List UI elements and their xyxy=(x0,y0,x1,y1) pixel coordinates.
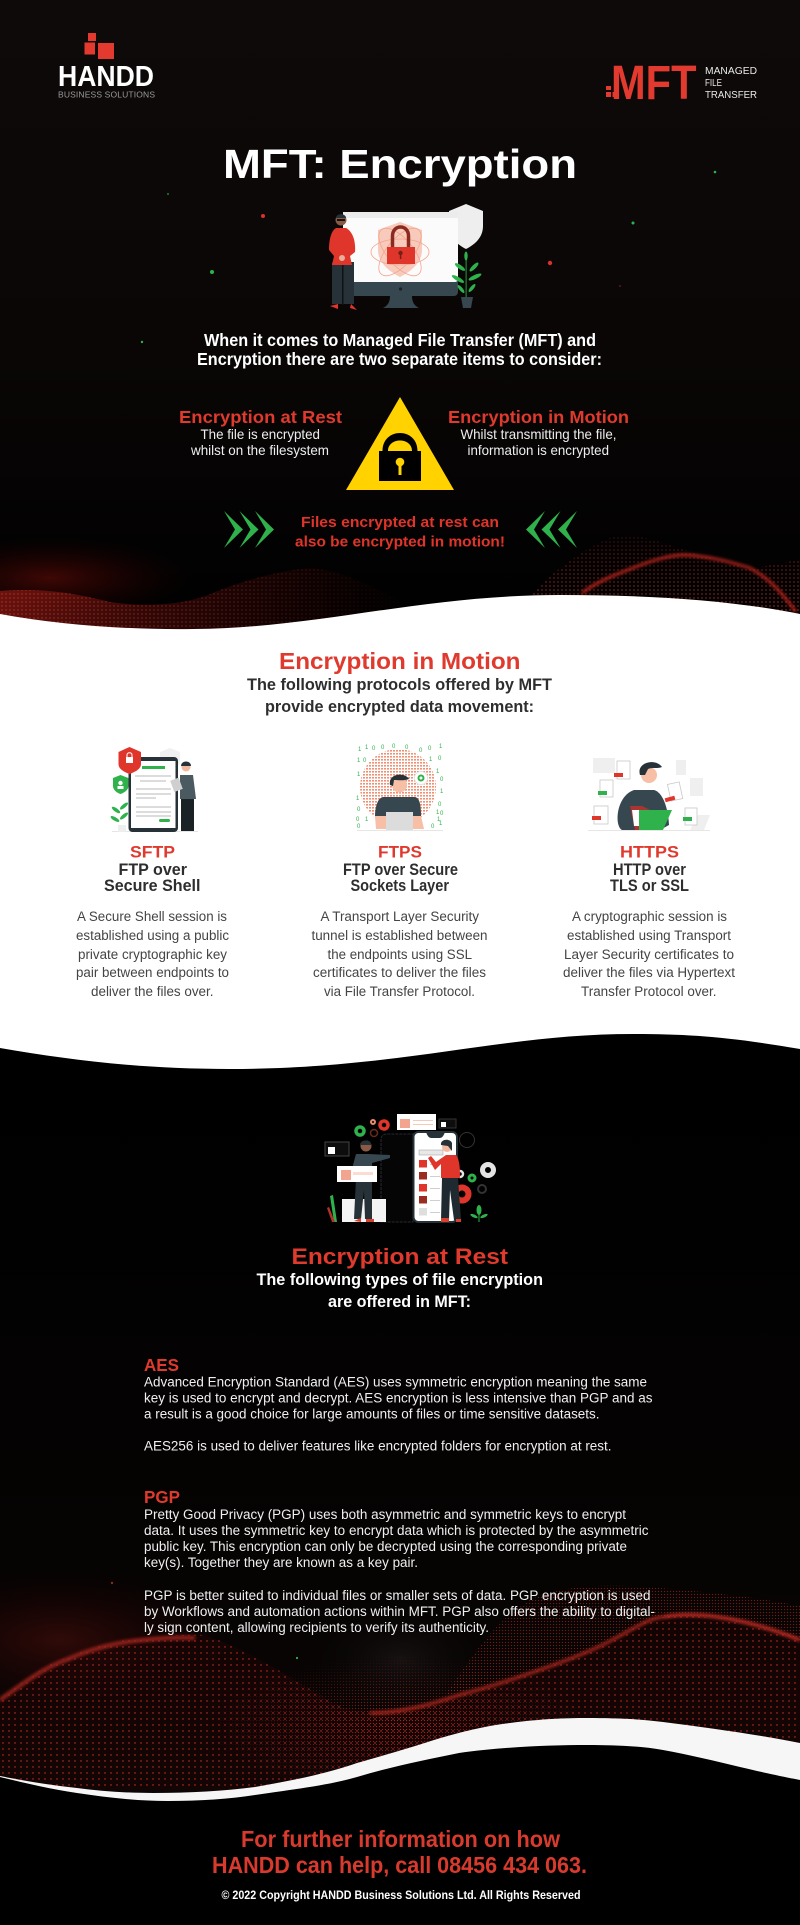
text: SFTP: private cryptographic key xyxy=(78,947,227,962)
icon: HTTPS person with documents xyxy=(588,758,710,831)
heading: encryption at rest: The following types of file encryption xyxy=(256,1271,543,1289)
text: SFTP: SFTP xyxy=(130,842,175,862)
wave: bottom dotted red waves xyxy=(0,1586,800,1790)
text: FTPS: FTP over Secure xyxy=(343,861,458,879)
illustration: monitor with padlock and person xyxy=(329,204,483,310)
text block: PGP: PGP is better suited to individual files or smaller sets of data. PGP encryption is used xyxy=(144,1588,650,1603)
background: white wave panel xyxy=(0,595,800,1069)
text: HTTPS: A cryptographic session is xyxy=(572,909,727,924)
icon: FTPS person with binary circle: 0 xyxy=(428,746,432,752)
heading: encryption at rest: Encryption at Rest xyxy=(292,1244,509,1269)
icon: SFTP phone with shields and person xyxy=(110,747,198,832)
panel: encryption in motion summary: Whilst transmitting the file, xyxy=(460,426,616,442)
icon: monitor xyxy=(343,212,458,308)
text: SFTP: A Secure Shell session is xyxy=(77,909,227,924)
text block: PGP: PGP xyxy=(144,1487,180,1507)
text block: PGP: by Workflows and automation actions within MFT. PGP also offers the ability to digital- xyxy=(144,1604,655,1619)
heading: encryption in motion xyxy=(247,648,553,716)
background: top dark panel xyxy=(0,0,800,640)
text block: PGP: data. It uses the symmetric key to encrypt data which is protected by the asymmetric xyxy=(144,1523,649,1538)
icon: person in red jacket xyxy=(329,214,357,310)
logo: MFT Managed File Transfer: MFT xyxy=(611,57,696,110)
icon: FTPS person with binary circle: 0 xyxy=(363,758,367,764)
text block: AES: key is used to encrypt and decrypt. AES encryption is less intensive than PGP and as xyxy=(144,1390,653,1406)
icon: FTPS person with binary circle: 1 xyxy=(437,817,441,823)
icon: padlock on shield xyxy=(371,221,429,283)
icon: FTPS person with binary circle: 1 xyxy=(357,772,361,778)
panel: encryption in motion summary: Encryption in Motion xyxy=(448,407,629,427)
logo: MFT Managed File Transfer: TRANSFER xyxy=(705,89,757,101)
heading: encryption at rest: are offered in MFT: xyxy=(328,1293,471,1311)
callout: files encrypted at rest xyxy=(295,514,505,550)
text: HTTPS: Transfer Protocol over. xyxy=(581,984,716,999)
icon: FTPS person with binary circle: 0 xyxy=(440,811,444,817)
heading: encryption in motion: provide encrypted data movement: xyxy=(265,697,534,716)
icon: man in red xyxy=(428,1140,461,1222)
icon: yellow warning triangle with padlock xyxy=(346,397,454,490)
text: SFTP xyxy=(76,842,229,999)
logo: HANDD Business Solutions xyxy=(58,33,155,100)
icon: FTPS person with binary circle: 1 xyxy=(365,817,369,823)
text: HTTPS: HTTP over xyxy=(613,861,687,879)
icon: front phone xyxy=(414,1132,457,1222)
heading: encryption at rest xyxy=(256,1244,543,1311)
icon: plant in pot xyxy=(451,252,482,308)
logo: MFT Managed File Transfer xyxy=(606,57,757,110)
icon: FTPS person with binary circle: 0 xyxy=(357,824,361,830)
text block: PGP xyxy=(144,1487,655,1635)
text: FTPS: Sockets Layer xyxy=(350,877,450,895)
text: SFTP: pair between endpoints to xyxy=(76,965,229,980)
panel: encryption at rest summary: whilst on the filesystem xyxy=(190,442,329,458)
logo: HANDD Business Solutions: HANDD xyxy=(58,61,154,93)
icon: FTPS person with binary circle: 0 xyxy=(431,824,435,830)
intro text: Encryption there are two separate items to consider: xyxy=(197,349,602,369)
text: SFTP: Secure Shell xyxy=(104,877,200,895)
icon: FTPS person with binary circle: 1 xyxy=(357,758,361,764)
icon: FTPS person with binary circle: 1 xyxy=(436,769,440,775)
panel: encryption at rest summary xyxy=(179,407,342,458)
text block: AES xyxy=(144,1355,653,1454)
text: HTTPS: Layer Security certificates to xyxy=(564,947,734,962)
text block: AES: AES256 is used to deliver features like encrypted folders for encryption at rest. xyxy=(144,1438,612,1454)
panel: encryption at rest summary: The file is encrypted xyxy=(200,426,320,442)
text: FTPS: FTPS xyxy=(378,842,422,862)
wave: top dotted red waves xyxy=(0,537,799,630)
intro text xyxy=(197,330,602,369)
footer copyright: © 2022 Copyright HANDD Business Solutions Ltd. All Rights Reserved xyxy=(222,1890,580,1902)
icon: FTPS person with binary circle: 1 xyxy=(439,744,443,750)
text: FTPS: certificates to deliver the files xyxy=(313,965,486,980)
icon: FTPS person with binary circle: 0 xyxy=(357,807,361,813)
text block: AES: Advanced Encryption Standard (AES) uses symmetric encryption meaning the same xyxy=(144,1374,647,1390)
text: SFTP: deliver the files over. xyxy=(91,984,214,999)
illustration: encryption at rest team with phone and gears xyxy=(325,1114,494,1222)
logo: MFT Managed File Transfer: FILE xyxy=(705,77,722,89)
icon: green chevrons left xyxy=(526,511,577,548)
footer call to action: For further information on how xyxy=(241,1826,560,1852)
icon: FTPS person with binary circle: 0 xyxy=(356,817,360,823)
text block: PGP: key(s). Together they are known as a key pair. xyxy=(144,1555,418,1570)
text: HTTPS: TLS or SSL xyxy=(610,877,689,895)
text: FTPS: tunnel is established between xyxy=(312,928,488,943)
footer call to action xyxy=(212,1826,587,1878)
icon: FTPS person with binary circle: 1 xyxy=(365,745,369,751)
icon: FTPS person with binary circle: 0 xyxy=(372,746,376,752)
icon: FTPS person with binary circle xyxy=(356,744,444,831)
title: MFT: Encryption xyxy=(223,141,577,187)
icon: FTPS person with binary circle: 0 xyxy=(392,744,396,750)
text: FTPS: the endpoints using SSL xyxy=(328,947,472,962)
icon: FTPS person with binary circle: 0 xyxy=(405,745,409,751)
sparkle dots: top xyxy=(141,171,716,343)
panel: encryption at rest summary: Encryption at Rest xyxy=(179,407,342,427)
icon: FTPS person with binary circle: 1 xyxy=(439,821,443,827)
heading: encryption in motion: The following protocols offered by MFT xyxy=(247,675,553,694)
text block: AES: a result is a good choice for large amounts of files or time sensitive datasets. xyxy=(144,1406,600,1422)
text block: AES: AES xyxy=(144,1355,179,1375)
footer call to action: HANDD can help, call 08456 434 063. xyxy=(212,1852,587,1878)
icon: box and plants xyxy=(327,1195,488,1222)
intro text: When it comes to Managed File Transfer (MFT) and xyxy=(204,330,596,350)
panel: encryption in motion xyxy=(0,595,800,1069)
text: SFTP: FTP over xyxy=(118,861,188,879)
text block: PGP: ly sign content, allowing recipients to verify its authenticity. xyxy=(144,1620,489,1635)
text: FTPS xyxy=(312,842,488,999)
icon: FTPS person with binary circle: 1 xyxy=(440,789,444,795)
icon: FTPS person with binary circle: 0 xyxy=(438,802,442,808)
icon: FTPS person with binary circle: 0 xyxy=(381,745,385,751)
icon: FTPS person with binary circle: 0 xyxy=(438,756,442,762)
text block: PGP: public key. This encryption can only be decrypted using the corresponding private xyxy=(144,1539,627,1554)
icon: top cards xyxy=(325,1114,456,1156)
callout: files encrypted at rest: also be encrypted in motion! xyxy=(295,534,505,550)
text: HTTPS: deliver the files via Hypertext xyxy=(563,965,735,980)
icon: FTPS person with binary circle: 1 xyxy=(429,757,433,763)
panel: encryption in motion summary xyxy=(448,407,629,458)
icon: green chevrons right xyxy=(224,511,274,548)
icon: FTPS person with binary circle: 0 xyxy=(419,748,423,754)
text: SFTP: established using a public xyxy=(76,928,229,943)
sparkle dots: bottom xyxy=(111,1582,298,1659)
logo: HANDD Business Solutions: BUSINESS SOLUTIONS xyxy=(58,90,155,100)
icon: FTPS person with binary circle: 1 xyxy=(356,796,360,802)
icon: gears xyxy=(356,1120,494,1200)
heading: encryption in motion: Encryption in Motion xyxy=(279,648,520,674)
text: FTPS: via File Transfer Protocol. xyxy=(324,984,475,999)
text: HTTPS: HTTPS xyxy=(620,842,679,862)
background: bottom black panel xyxy=(0,1040,800,1925)
callout: files encrypted at rest: Files encrypted at rest can xyxy=(301,514,499,531)
text: HTTPS: established using Transport xyxy=(567,928,731,943)
icon: FTPS person with binary circle: 0 xyxy=(440,777,444,783)
panel: encryption in motion summary: information is encrypted xyxy=(468,442,609,458)
icon: FTPS person with binary circle: 1 xyxy=(436,810,440,816)
text: HTTPS xyxy=(563,842,735,999)
wave: white band and black footer xyxy=(0,1718,800,1925)
text block: PGP: Pretty Good Privacy (PGP) uses both asymmetric and symmetric keys to encrypt xyxy=(144,1507,626,1522)
icon: back phone outline xyxy=(381,1134,413,1222)
text: FTPS: A Transport Layer Security xyxy=(320,909,479,924)
icon: FTPS person with binary circle: 1 xyxy=(358,747,362,753)
icon: man with card xyxy=(337,1140,390,1222)
logo: MFT Managed File Transfer: MANAGED xyxy=(705,65,757,77)
icon: shield behind monitor xyxy=(449,204,483,249)
